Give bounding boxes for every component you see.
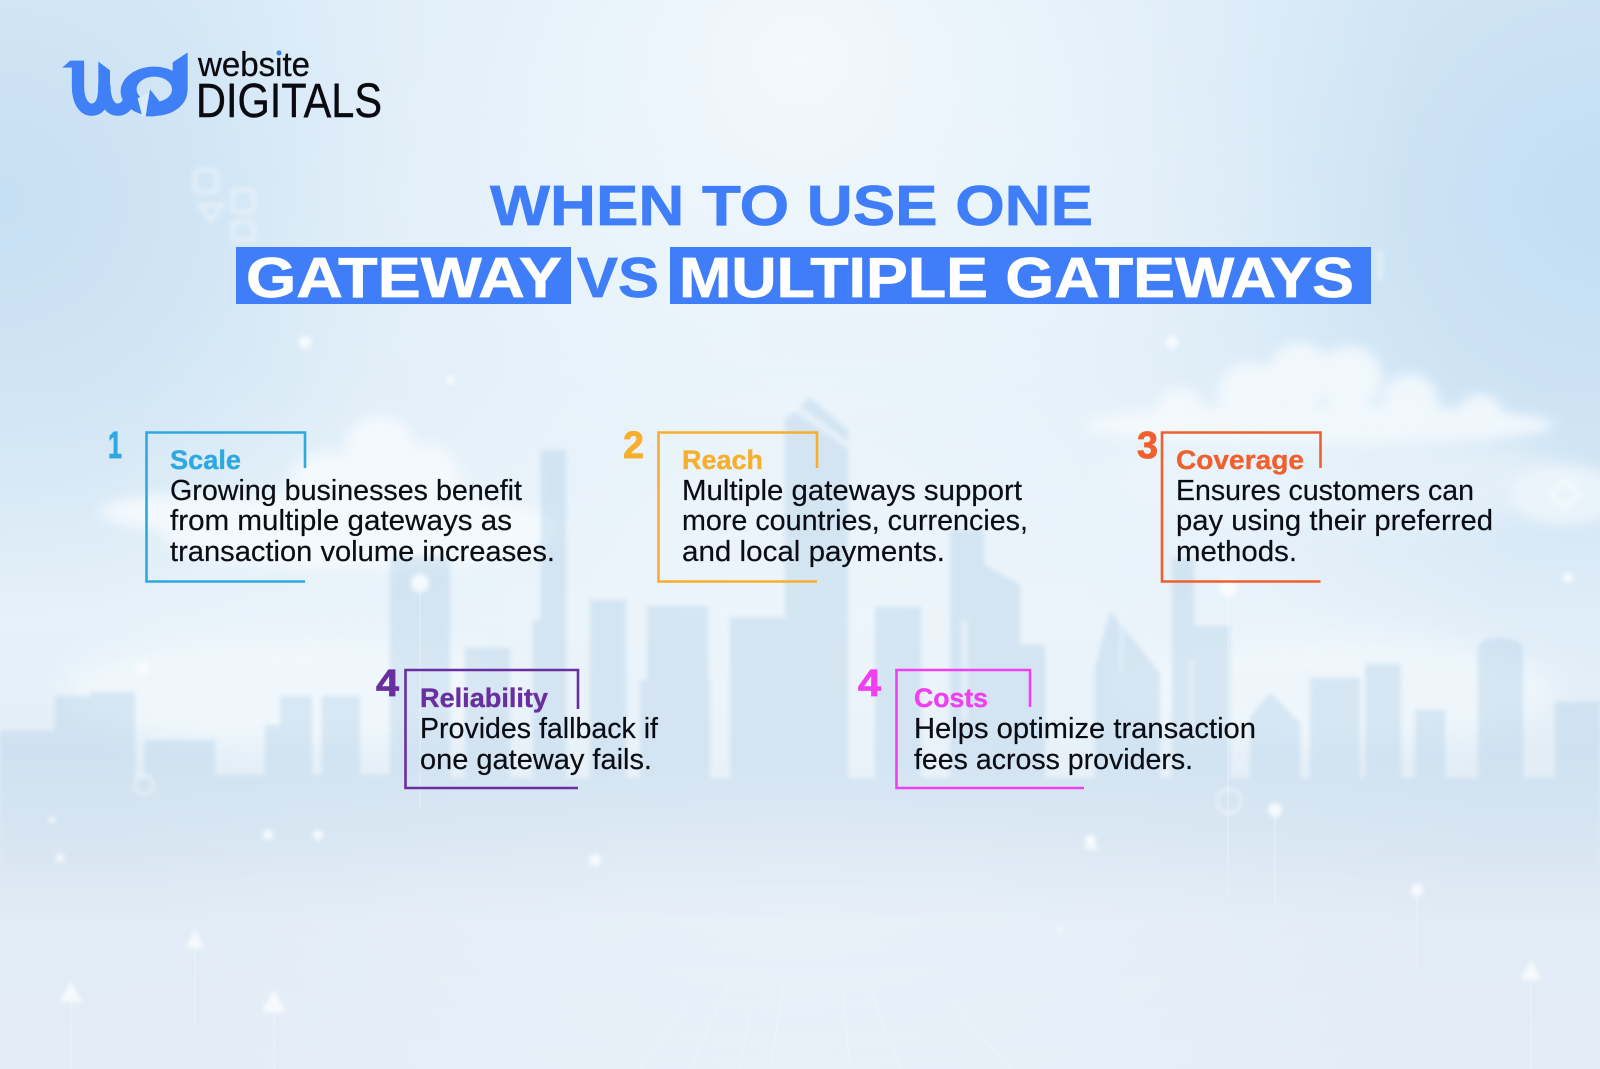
vs: VS [577,246,659,310]
card 4: Reliability [376,663,659,788]
body: Coverage: Ensures customers can [1176,475,1474,507]
bracket 5 [896,670,1084,788]
city skyline [0,398,1600,862]
card 1: Scale [108,425,555,582]
wordmark: DIGITALS: DIGITALS [196,75,382,128]
number 4 pink: 4 [858,663,881,705]
body: Reach: more countries, currencies, [682,505,1028,537]
body: Scale: from multiple gateways as [170,505,512,537]
title [236,174,1371,310]
highlight: gateway: GATEWAY [246,246,562,310]
body: Coverage: pay using their preferred [1176,505,1493,537]
highlight: multiple gateways: MULTIPLE GATEWAYS [679,246,1354,310]
body: Reliability: Provides fallback if [420,713,659,745]
card 2: Reach [623,425,1028,582]
glowing nodes and arrows [49,336,1573,1069]
body: Costs: Helps optimize transaction [914,713,1256,745]
icon: WD monogram [62,52,188,117]
body: Scale: transaction volume increases. [170,536,555,568]
body: Costs [914,713,1256,776]
card 3: Coverage [1137,425,1493,582]
bracket 4 [406,670,578,788]
body: Scale: Growing businesses benefit [170,475,522,507]
number 3: 3 [1137,425,1158,467]
clouds [60,315,1600,745]
logo: Website Digitals [62,46,382,128]
body: Reach: Multiple gateways support [682,475,1022,507]
body: Scale [170,475,555,568]
wordmark: website: website [197,46,310,84]
body: Costs: fees across providers. [914,744,1193,776]
heading: Coverage: Coverage [1176,445,1304,475]
number 1: 1 [108,425,122,467]
body: Reach [682,475,1028,568]
title line 1: WHEN TO USE ONE [490,174,1093,238]
heading: Reliability: Reliability [420,683,548,713]
heading: Scale: Scale [170,445,241,475]
logo dot [276,50,282,56]
faint tech icons [195,170,1579,508]
body: Reliability: one gateway fails. [420,744,652,776]
body: Coverage: methods. [1176,536,1297,568]
body: Reliability [420,713,659,776]
bracket 1 [146,432,305,582]
bracket 2 [658,432,817,582]
body: Reach: and local payments. [682,536,945,568]
body: Coverage [1176,475,1493,568]
number 4 purple: 4 [376,663,399,705]
heading: Costs: Costs [914,683,988,713]
card 5: Costs [858,663,1256,788]
bracket 3 [1162,432,1320,582]
number 2: 2 [623,425,644,467]
heading: Reach: Reach [682,445,763,475]
